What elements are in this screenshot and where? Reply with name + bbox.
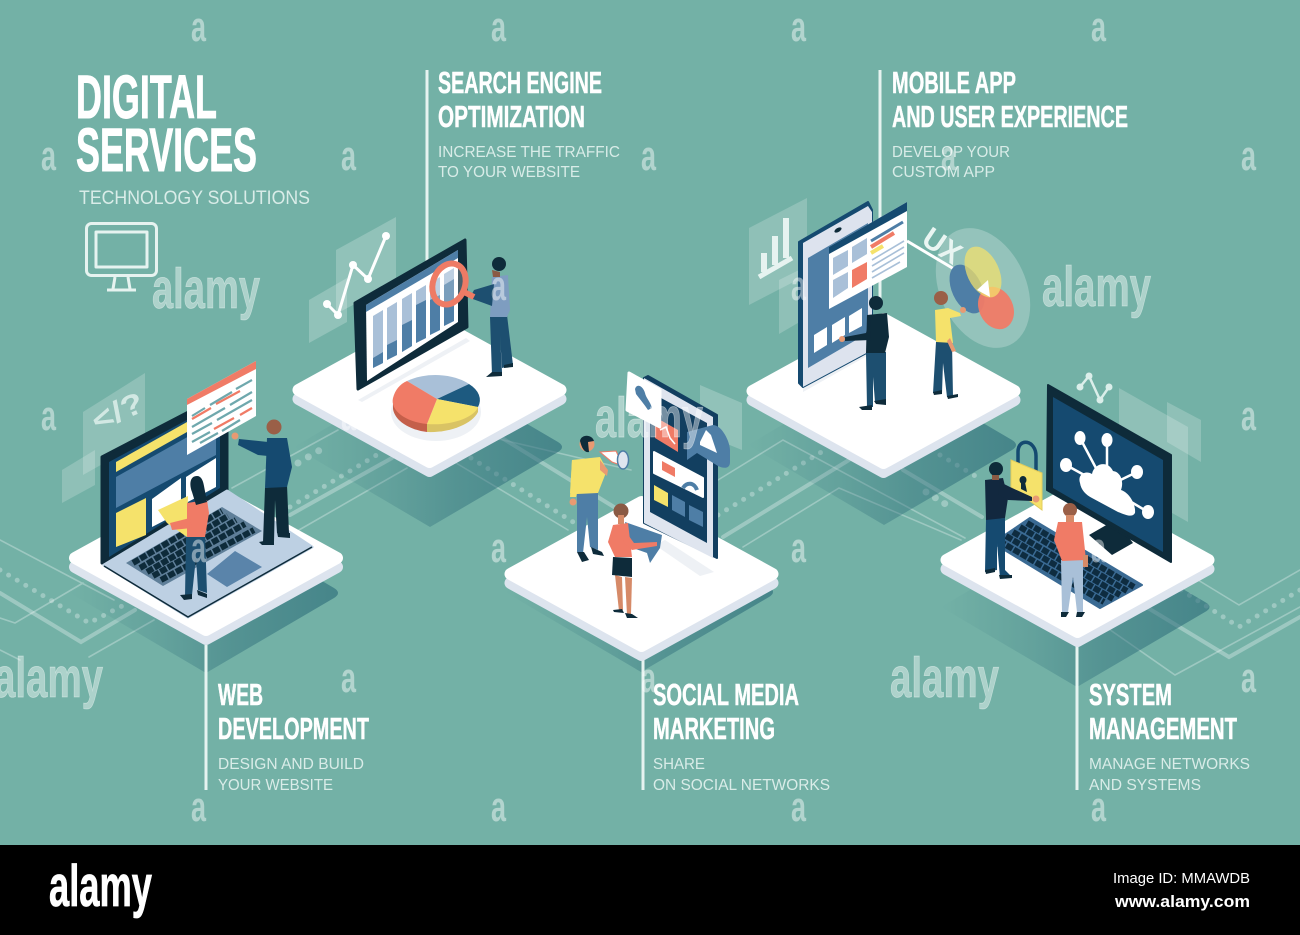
laptop (102, 392, 312, 617)
watermarks: small tiled marks: a (791, 3, 806, 50)
watermarks: large alamy logos (0, 255, 1151, 710)
heading: social media marketing: MARKETING (653, 711, 775, 746)
image id: Image ID: MMAWDB (1113, 870, 1250, 887)
heading: system management (1089, 677, 1250, 794)
heading: search engine optimization (438, 65, 620, 181)
heading: social media marketing: SOCIAL MEDIA (653, 677, 799, 712)
watermarks: small tiled marks: a (791, 524, 806, 571)
heading: web development: YOUR WEBSITE (218, 777, 333, 794)
man with megaphone (570, 436, 628, 562)
panel: search engine optimization scene (298, 217, 560, 471)
platform (946, 488, 1208, 641)
heading: mobile app and user experience: DEVELOP YOUR (892, 144, 1010, 161)
heading: system management: MANAGE NETWORKS (1089, 756, 1250, 773)
connector lines (206, 70, 1077, 790)
watermarks: large alamy logos: alamy (152, 257, 260, 321)
heading: search engine optimization: INCREASE THE TRAFFIC (438, 144, 620, 161)
panel: system management scene (946, 372, 1208, 641)
monitor with bar chart (355, 240, 470, 402)
magnifying glass (427, 259, 474, 309)
floating bar chart (749, 198, 807, 334)
heading: search engine optimization: SEARCH ENGINE (438, 65, 602, 100)
platform (752, 319, 1014, 472)
woman with speech bubble (608, 504, 662, 618)
watermarks: small tiled marks: a (1241, 654, 1256, 701)
phone with floating window (799, 202, 907, 392)
footer logo: alamy (49, 854, 152, 919)
background circuit lines (0, 430, 1300, 675)
heading: mobile app and user experience: CUSTOM APP (892, 164, 995, 181)
watermarks: small tiled marks: a (341, 392, 356, 439)
watermarks: small tiled marks: a (641, 132, 656, 179)
padlock (1011, 442, 1042, 510)
watermarks: large alamy logos: alamy (890, 646, 999, 710)
panel: mobile app and user experience scene (749, 198, 1049, 472)
smartphone (644, 376, 717, 576)
watermarks: small tiled marks: a (1091, 783, 1106, 830)
watermarks: small tiled marks: a (341, 654, 356, 701)
watermarks: small tiled marks: a (191, 3, 206, 50)
platform (298, 318, 560, 471)
heading: mobile app and user experience: MOBILE APP (892, 65, 1016, 100)
platform (510, 502, 772, 655)
watermarks: small tiled marks: a (491, 3, 506, 50)
floating line chart (309, 217, 396, 343)
watermarks: small tiled marks: a (1091, 524, 1106, 571)
UX diagram (907, 213, 1049, 363)
heading: web development: DESIGN AND BUILD (218, 756, 364, 773)
watermarks: small tiled marks: a (491, 262, 506, 309)
watermarks: small tiled marks: a (1091, 3, 1106, 50)
heading: social media marketing: SHARE (653, 756, 705, 773)
watermarks: small tiled marks: a (41, 392, 56, 439)
platform (75, 486, 337, 639)
watermarks: small tiled marks: a (41, 132, 56, 179)
floating social icons (627, 373, 730, 468)
floating transparent panel (700, 385, 742, 450)
watermarks: small tiled marks: a (1241, 132, 1256, 179)
platform shadows (70, 365, 1210, 687)
person at UX diagram (933, 291, 966, 399)
heading: social media marketing: ON SOCIAL NETWORKS (653, 777, 830, 794)
watermarks: small tiled marks: a (791, 783, 806, 830)
man at padlock (985, 462, 1040, 579)
floating panels and network icon (1076, 372, 1201, 522)
pie chart (391, 375, 481, 441)
watermarks: large alamy logos: alamy (595, 386, 703, 450)
monitor with cloud network (1047, 385, 1171, 562)
heading: web development (218, 677, 369, 794)
UX diagram: UX (916, 221, 968, 271)
watermarks: small tiled marks: a (1241, 392, 1256, 439)
watermarks: small tiled marks: a (641, 654, 656, 701)
keyboard (993, 518, 1142, 608)
heading: system management: AND SYSTEMS (1089, 777, 1201, 794)
standing man (232, 420, 292, 545)
title (76, 63, 257, 184)
floating code window (187, 361, 256, 455)
watermarks: small tiled marks: a (941, 132, 956, 179)
heading: web development: DEVELOPMENT (218, 711, 369, 746)
watermarks: small tiled marks: a (191, 524, 206, 571)
watermarks: small tiled marks: a (341, 132, 356, 179)
footer bar (0, 845, 1300, 935)
heading: search engine optimization: TO YOUR WEBSITE (438, 164, 580, 181)
heading: social media marketing (653, 677, 830, 794)
watermarks: small tiled marks: a (491, 783, 506, 830)
panel: web development scene (62, 361, 337, 639)
watermarks: small tiled marks: a (191, 783, 206, 830)
floating code panel (62, 373, 149, 503)
floating code panel: </? (86, 386, 149, 438)
heading: mobile app and user experience: AND USER EXPERIENCE (892, 99, 1128, 134)
heading: mobile app and user experience (892, 65, 1128, 181)
title: SERVICES (76, 116, 257, 184)
person at phone (839, 296, 889, 410)
watermarks: small tiled marks: a (491, 524, 506, 571)
heading: search engine optimization: OPTIMIZATION (438, 99, 585, 134)
footer url: www.alamy.com (1114, 892, 1250, 911)
icon: computer monitor (86, 224, 156, 290)
heading: system management: SYSTEM (1089, 677, 1172, 712)
person in coral shirt (1054, 503, 1088, 617)
heading: web development: WEB (218, 677, 263, 712)
title: DIGITAL (76, 63, 217, 131)
panel: social media marketing scene (510, 373, 772, 655)
watermarks: large alamy logos: alamy (1042, 255, 1151, 319)
watermarks: small tiled marks: a (791, 262, 806, 309)
person with magnifying glass (470, 257, 513, 377)
woman with yellow paper (158, 476, 209, 600)
subtitle: TECHNOLOGY SOLUTIONS (79, 187, 310, 209)
